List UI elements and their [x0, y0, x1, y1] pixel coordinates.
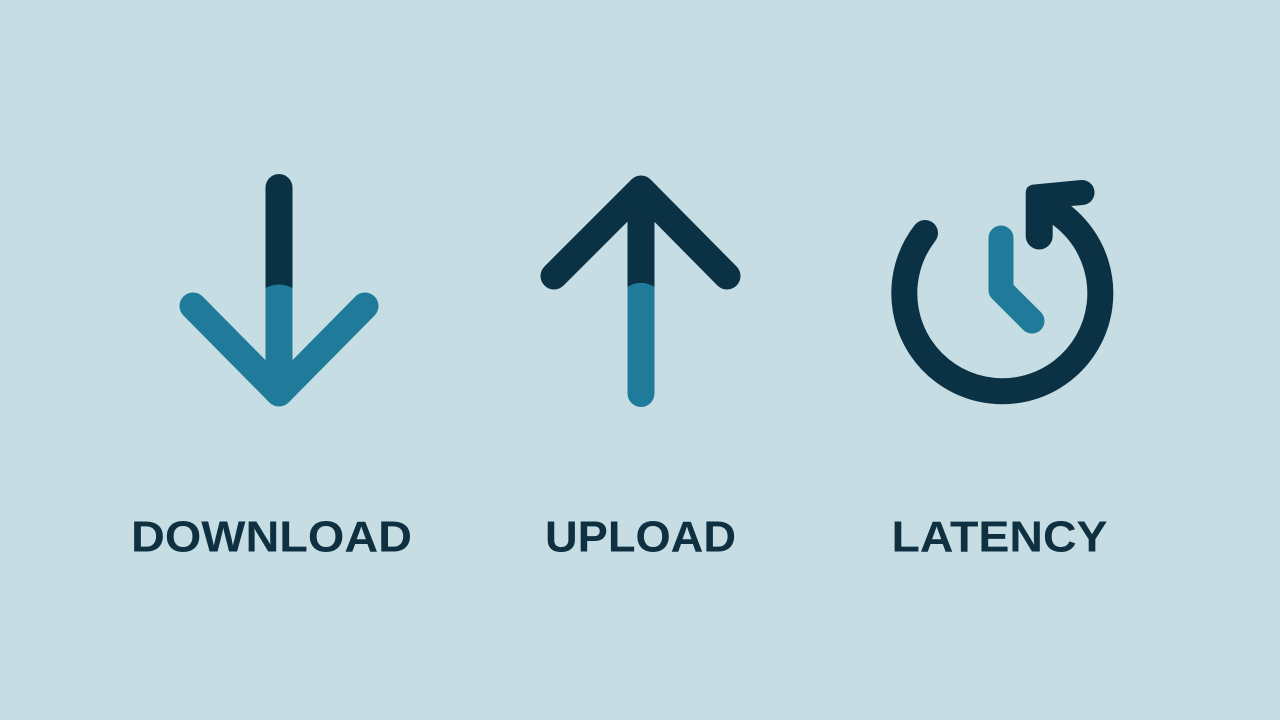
icon: latency clock with circular arrow: [904, 180, 1100, 391]
icon: download arrow: [193, 174, 365, 393]
label: upload: UPLOAD: [545, 512, 736, 562]
label: latency: LATENCY: [892, 512, 1108, 562]
label: download: DOWNLOAD: [131, 512, 412, 562]
icon: upload arrow: [554, 189, 727, 407]
